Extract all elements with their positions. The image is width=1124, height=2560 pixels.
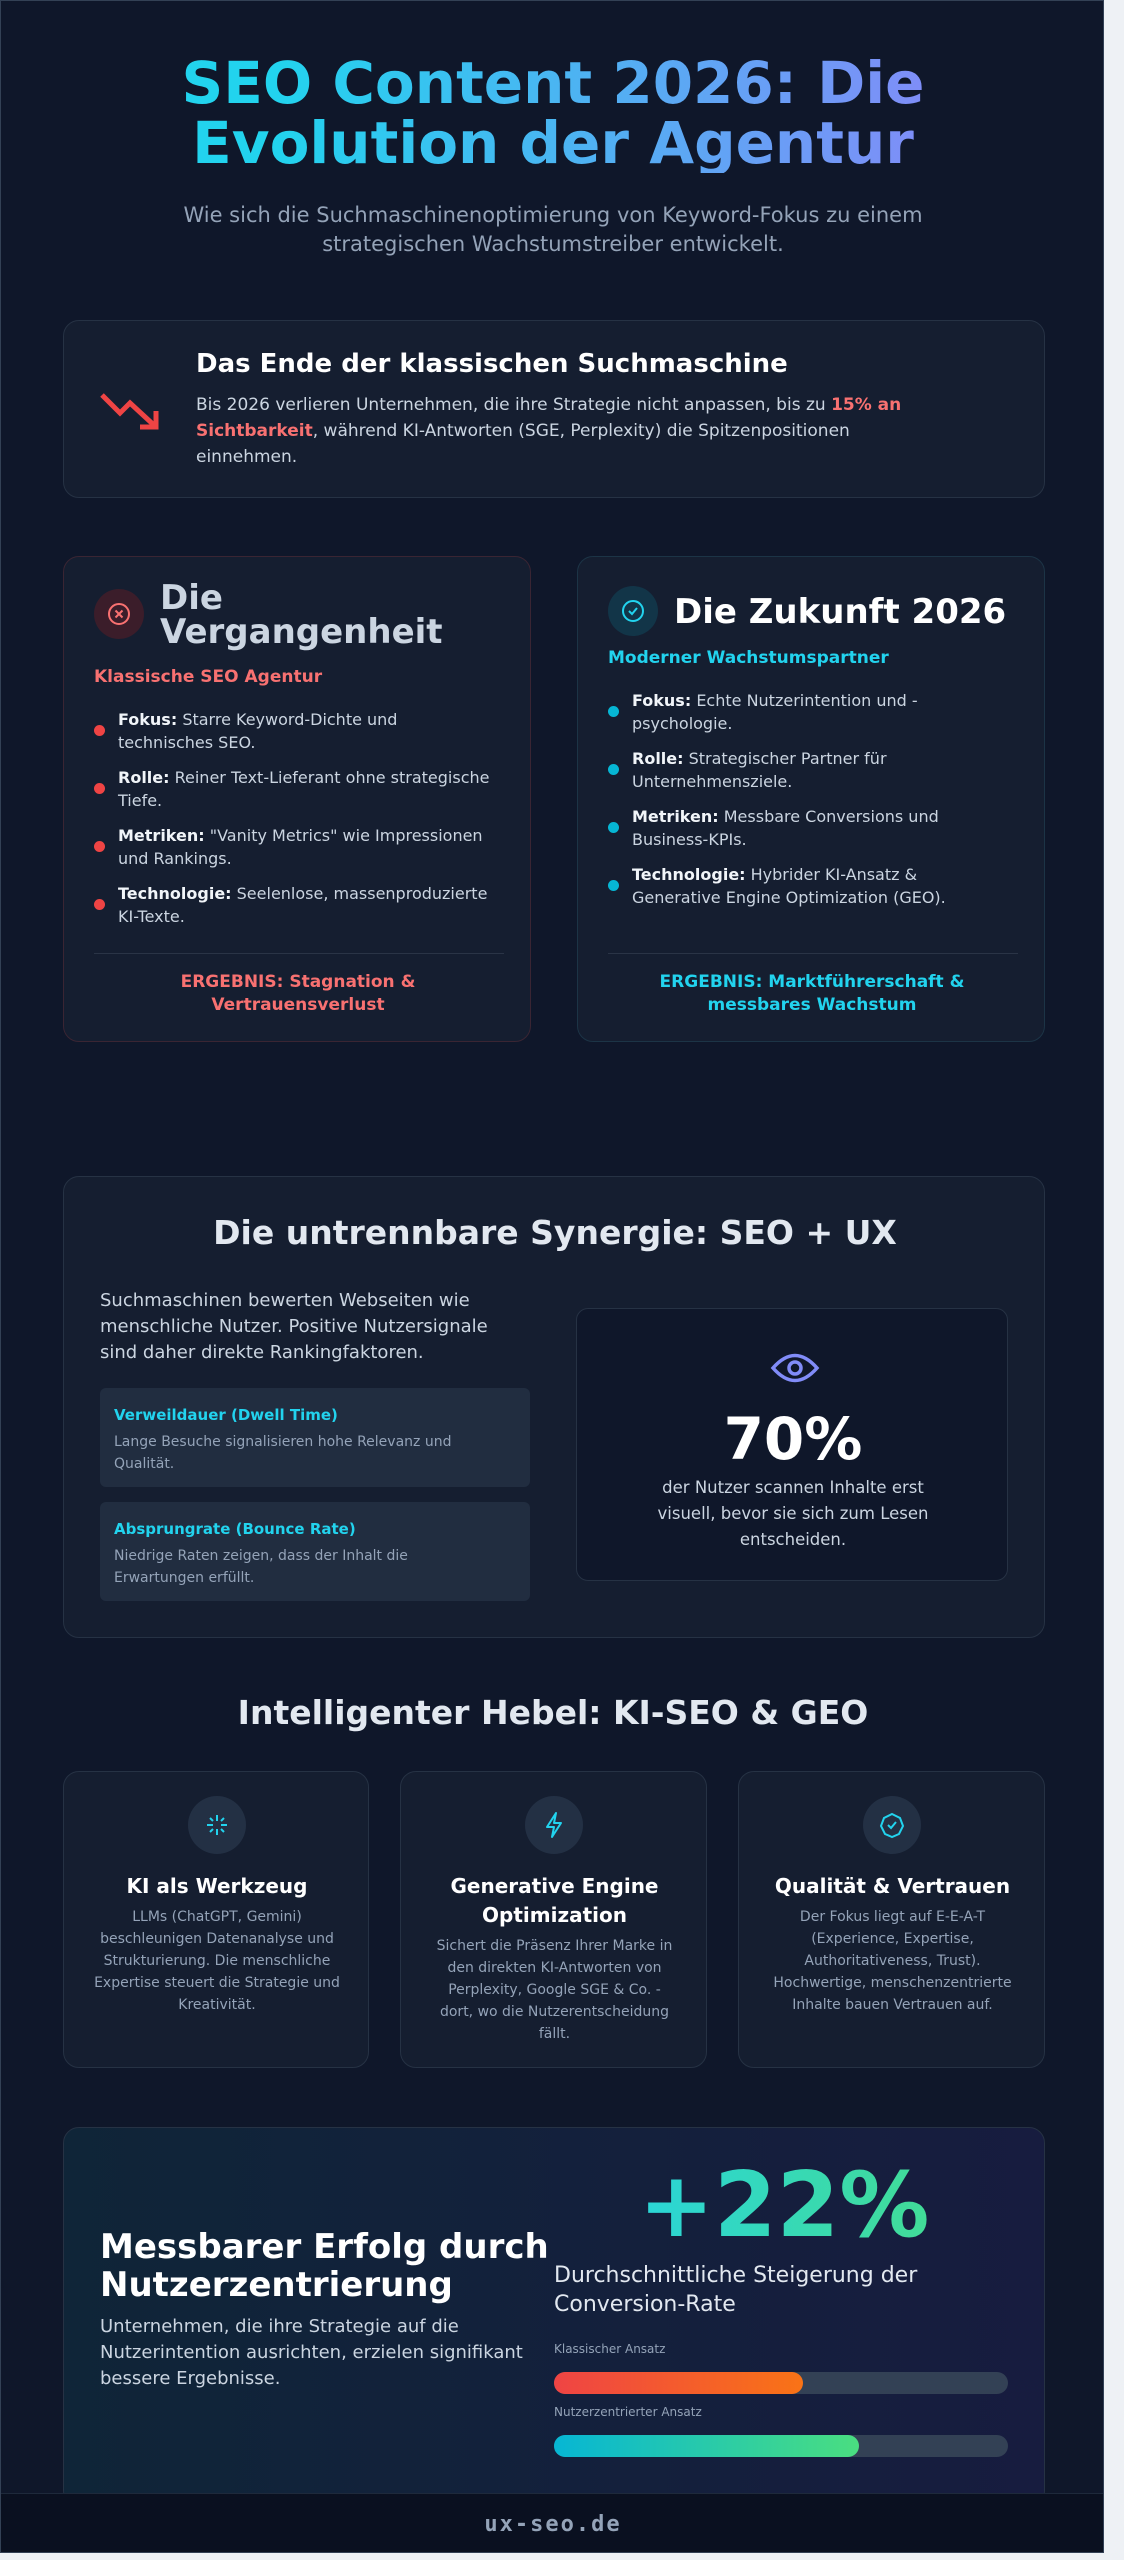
stat: 70% <box>724 1405 862 1473</box>
icon: x circle <box>94 589 144 639</box>
result <box>660 972 964 1015</box>
heading: KI-SEO & GEO: Intelligenter Hebel: KI-SEO & GEO <box>238 1693 868 1732</box>
card: Qualität <box>738 1771 1045 2068</box>
list: Fokus: Echte Nutzerintention und -psychologie. <box>632 691 918 733</box>
list: Rolle: Strategischer Partner für Unternehmensziele. <box>632 749 887 791</box>
icon: check circle <box>608 586 658 636</box>
bar chart: Nutzerzentrierter Ansatz <box>554 2405 702 2419</box>
icon: lightning <box>525 1796 583 1854</box>
result: Vertrauensverlust <box>211 995 385 1015</box>
icon: eye <box>770 1354 820 1382</box>
list <box>94 710 489 926</box>
text: Bis 2026 verlieren Unternehmen, die ihre Strategie nicht anpassen, bis zu 15% an Sichtbarkeit, während KI-Antworten (SGE, Perplexity) die Spitzenpositionen einnehmen. <box>196 395 901 467</box>
panel: measurable success <box>63 2127 1045 2507</box>
heading: Messbarer Erfolg durch Nutzerzentrierung <box>100 2227 549 2305</box>
heading: Die Zukunft 2026 <box>674 592 1006 632</box>
subtitle: Wie sich die Suchmaschinenoptimierung von Keyword-Fokus zu einem <box>183 203 923 227</box>
title: SEO Content 2026: Die <box>181 49 925 117</box>
result <box>181 972 415 1015</box>
list: Rolle: Reiner Text-Lieferant ohne strategische Tiefe. <box>118 768 489 810</box>
result: ERGEBNIS: Stagnation & <box>181 972 415 992</box>
stat: +22% <box>534 2154 1034 2258</box>
box: dwell time: Verweildauer (Dwell Time) <box>114 1406 338 1424</box>
subheading: Klassische SEO Agentur <box>94 667 322 687</box>
footer <box>1 2493 1105 2554</box>
panel: synergy <box>63 1176 1045 1638</box>
result: ERGEBNIS: Marktführerschaft & <box>660 972 964 992</box>
icon: trending down <box>100 393 158 430</box>
box: bounce rate <box>100 1502 530 1601</box>
card: KI als Werkzeug: LLMs (ChatGPT, Gemini) beschleunigen Datenanalyse und Strukturierung. Die menschliche Expertise steuert die Strategie und Kreativität. <box>94 1909 340 2013</box>
box: bounce rate: Niedrige Raten zeigen, dass der Inhalt die Erwartungen erfüllt. <box>114 1548 408 1586</box>
card: GEO: Sichert die Präsenz Ihrer Marke in den direkten KI-Antworten von Perplexity, Google SGE & Co. - dort, wo die Nutzerentscheidung fällt. <box>437 1938 672 2042</box>
result: messbares Wachstum <box>708 995 916 1015</box>
box: dwell time: Lange Besuche signalisieren hohe Relevanz und Qualität. <box>114 1434 451 1472</box>
subtitle: strategischen Wachstumstreiber entwickelt. <box>322 232 784 256</box>
list: Metriken: "Vanity Metrics" wie Impressionen und Rankings. <box>118 826 483 868</box>
subtitle <box>183 203 923 256</box>
card: Qualität: Qualität & Vertrauen <box>775 1874 1010 1898</box>
list <box>608 691 946 907</box>
card: GEO: Generative Engine <box>450 1874 658 1898</box>
title <box>1 53 1105 173</box>
heading: Das Ende der klassischen Suchmaschine <box>196 349 788 379</box>
panel: future <box>577 556 1045 1042</box>
heading: Die <box>160 578 223 618</box>
list: Technologie: Hybrider KI-Ansatz & Generative Engine Optimization (GEO). <box>632 865 946 907</box>
icon: sparkle <box>188 1796 246 1854</box>
heading <box>160 578 443 652</box>
stat box: 70%: der Nutzer scannen Inhalte erst visuell, bevor sie sich zum Lesen entscheiden. <box>658 1478 928 1549</box>
icon: badge check <box>863 1796 921 1854</box>
heading: Vergangenheit <box>160 612 443 652</box>
text: Unternehmen, die ihre Strategie auf die Nutzerintention ausrichten, erzielen signifikant bessere Ergebnisse. <box>100 2316 523 2389</box>
card: KI als Werkzeug: KI als Werkzeug <box>127 1874 307 1898</box>
panel: past <box>63 556 531 1042</box>
card: GEO <box>400 1771 707 2068</box>
footer: ux-seo.de <box>484 2512 622 2537</box>
panel: measurable success: Durchschnittliche Steigerung der Conversion-Rate <box>554 2263 917 2317</box>
card: GEO: Optimization <box>482 1903 627 1927</box>
title: Evolution der Agentur <box>192 109 914 177</box>
panel: end of classic search <box>63 320 1045 498</box>
card: KI als Werkzeug <box>63 1771 369 2068</box>
subheading: Moderner Wachstumspartner <box>608 648 889 668</box>
box: bounce rate: Absprungrate (Bounce Rate) <box>114 1520 356 1538</box>
bar chart: Klassischer Ansatz <box>554 2342 665 2356</box>
card: Qualität: Der Fokus liegt auf E-E-A-T (Experience, Expertise, Authoritativeness, Trust). Hochwertige, menschenzentrierte Inhalte bauen Vertrauen auf. <box>773 1909 1012 2013</box>
list: Metriken: Messbare Conversions und Business-KPIs. <box>632 807 939 849</box>
heading: Die untrennbare Synergie: SEO + UX <box>213 1213 897 1252</box>
bar chart <box>554 2342 1008 2457</box>
stat box: 70% <box>576 1308 1008 1581</box>
list: Technologie: Seelenlose, massenproduzierte KI-Texte. <box>118 884 487 926</box>
box: dwell time <box>100 1388 530 1487</box>
list: Fokus: Starre Keyword-Dichte und technisches SEO. <box>118 710 397 752</box>
intro text: Suchmaschinen bewerten Webseiten wie menschliche Nutzer. Positive Nutzersignale sind daher direkte Rankingfaktoren. <box>100 1290 488 1363</box>
